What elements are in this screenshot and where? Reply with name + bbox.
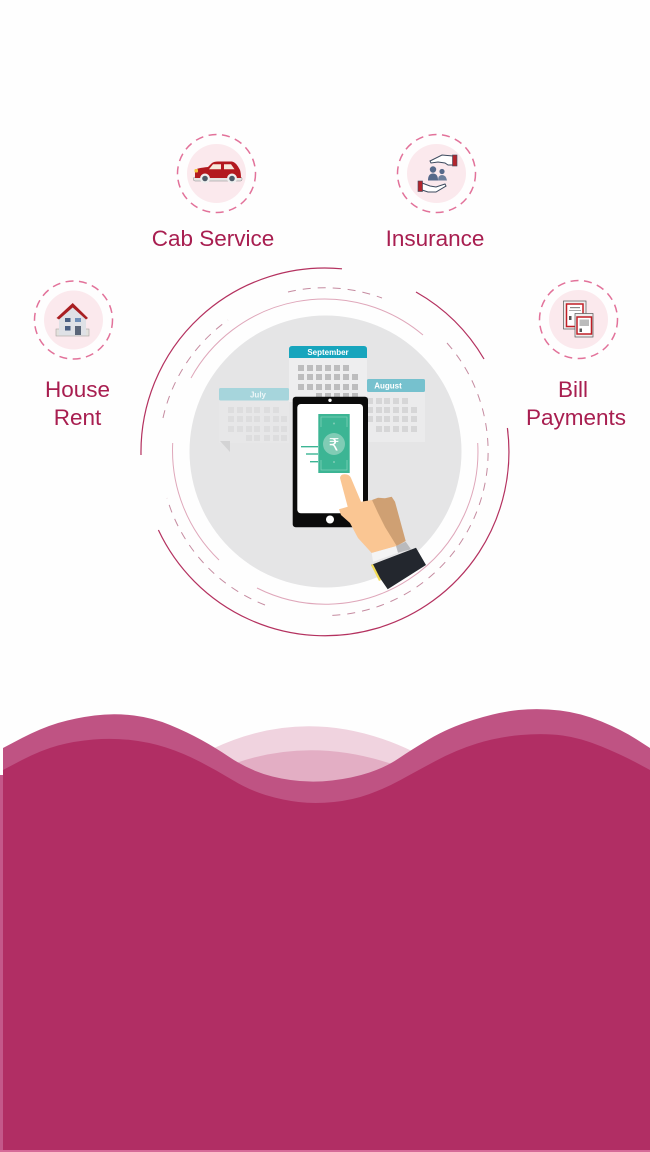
label: House: House [45,377,110,402]
left edge strip [0,775,3,1150]
dashed middle arcs [163,288,488,616]
badge: cab service [178,134,256,212]
bottom edge strip [0,1150,650,1152]
calendar: August: August [374,382,402,390]
calendar: August [367,379,425,442]
badge: insurance [398,134,476,212]
banknote with rupee: ₹ [329,436,339,456]
label: Bill: Bill [558,377,588,402]
inner thin pink arcs [173,299,478,604]
calendar: July: July [250,390,267,400]
badge: bill payments [540,280,618,358]
wave: main crimson panel [3,734,650,1150]
wave: translucent upper band [3,709,650,820]
calendar: July [219,388,289,452]
badge: house rent [34,281,112,359]
outer crimson arcs [141,268,509,636]
label: Cab Service: Cab Service [152,226,274,251]
label: Payments: Payments [526,405,626,430]
icon: hands protecting people [418,155,457,192]
wave: back pale arc [212,726,414,790]
central grey disc [190,316,462,588]
calendar: September [289,346,367,402]
icon: house [56,303,89,336]
calendar: September: September [307,348,349,357]
label: Insurance: Insurance [386,226,484,251]
icon: bills [564,301,593,337]
icon: car [194,162,242,184]
wave: front pale arc [236,750,392,790]
motion lines [301,447,318,462]
phone [293,397,368,527]
label: Rent: Rent [54,405,102,430]
hand with cuff [339,474,426,589]
